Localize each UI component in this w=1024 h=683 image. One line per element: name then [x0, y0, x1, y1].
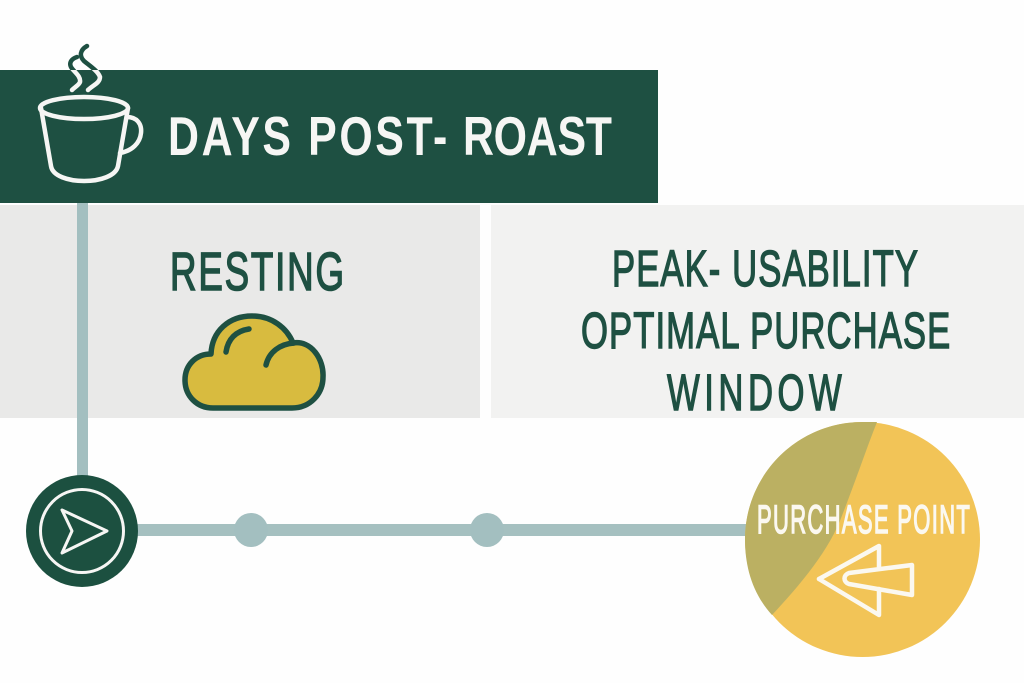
panel: resting: [0, 205, 480, 418]
start node with arrow: [26, 475, 138, 587]
timeline vertical connector: [77, 203, 88, 483]
text: peak usability optimal purchase window: WINDOW: [667, 366, 842, 422]
header banner: [0, 70, 658, 203]
text: peak usability optimal purchase window: PEAK- USABILITY: [612, 242, 918, 298]
icon: play arrow: [62, 510, 107, 553]
timeline node 2: [470, 513, 504, 547]
timeline node 1: [234, 513, 268, 547]
purchase point circle: [745, 422, 980, 657]
heading: resting: RESTING: [170, 241, 344, 302]
heading: days post-roast: ROAST: [463, 106, 612, 167]
timeline horizontal connector: [130, 524, 750, 536]
icon: yellow cloud: [185, 316, 323, 408]
text: peak usability optimal purchase window: OPTIMAL PURCHASE: [581, 304, 950, 360]
icon: back arrow: [819, 546, 912, 615]
icon: coffee cup with steam: [40, 46, 141, 181]
text: peak usability optimal purchase window: [581, 242, 950, 422]
label: purchase point: PURCHASE POINT: [757, 497, 970, 542]
heading: days post-roast: [168, 106, 612, 167]
panel: peak usability: [491, 205, 1024, 422]
heading: days post-roast: DAYS POST-: [168, 106, 447, 167]
